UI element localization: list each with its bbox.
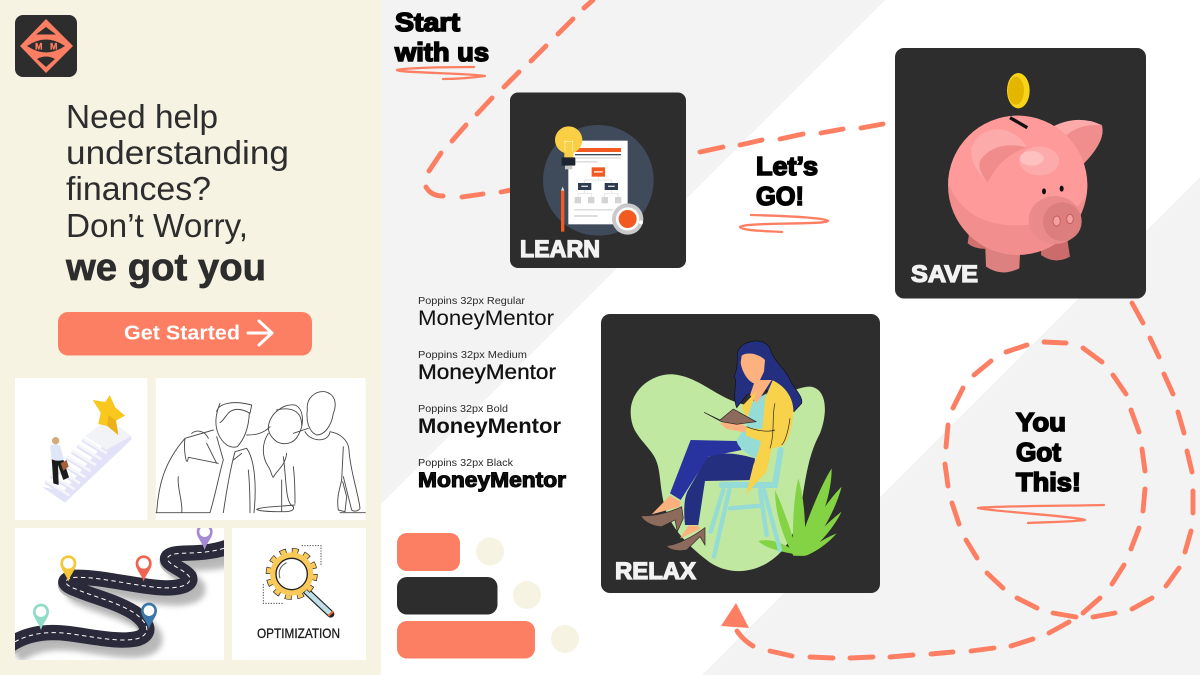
heading: need help understanding finances: we got you [65, 247, 266, 289]
specimen: regular [418, 295, 554, 330]
text: start with us: Start [395, 7, 460, 37]
hand [720, 420, 747, 432]
specimen: bold: MoneyMentor [418, 415, 561, 438]
green blob [631, 374, 825, 571]
arrow head [721, 603, 749, 628]
text: lets go [740, 151, 828, 232]
pin: yellow [60, 555, 76, 582]
cardigan [742, 380, 793, 494]
heading: need help understanding finances: Need help [66, 98, 218, 135]
stair case [42, 425, 132, 503]
front leg [670, 440, 742, 500]
button: get started: Get Started [124, 322, 240, 344]
left friend outline [157, 403, 255, 513]
label: optimization: OPTIMIZATION [257, 625, 340, 641]
label: relax: RELAX [615, 558, 696, 585]
arrow: dashed path from learn to save [700, 124, 883, 152]
road centre line [8, 547, 227, 646]
heading: need help understanding finances: understanding [66, 134, 289, 171]
typography specimen list [418, 295, 566, 492]
panel: left cream sidebar [0, 0, 381, 675]
specimen: black: Poppins 32px Black [418, 457, 514, 469]
text: you got this: Got [1016, 437, 1061, 467]
specimen: regular: MoneyMentor [418, 307, 554, 330]
panel: save card [895, 48, 1146, 298]
top [737, 393, 767, 458]
shoes [641, 507, 705, 551]
feet [652, 496, 700, 538]
icon: gear and magnifier [263, 546, 333, 616]
book [704, 409, 756, 424]
icon: piggy bank [943, 73, 1103, 272]
text: you got this: You [1016, 407, 1066, 437]
label: learn: LEARN [520, 236, 600, 263]
text: you got this [978, 407, 1104, 523]
panel: winding road map [15, 528, 224, 660]
background: upper-left grey diagonal [381, 0, 885, 504]
text: start with us [394, 7, 489, 79]
back leg [684, 453, 755, 525]
specimen: bold: Poppins 32px Bold [418, 403, 508, 415]
background: right area [381, 0, 1200, 675]
pin: red [136, 555, 152, 582]
specimen: black: MoneyMentor [418, 469, 566, 492]
icon: MoneyMentor logo [15, 15, 77, 77]
panel: relax card [601, 314, 880, 593]
panel: optimization image [232, 528, 366, 660]
text: start with us: with us [394, 37, 489, 67]
arrow: dashed path from top into learn card [426, 0, 593, 197]
star [93, 395, 125, 435]
heading: need help understanding finances [65, 98, 289, 289]
icon: MoneyMentor logo: M [35, 42, 42, 52]
road shadow [16, 557, 235, 656]
road edge [8, 550, 227, 649]
road surface [8, 547, 227, 646]
specimen: medium: Poppins 32px Medium [418, 349, 527, 361]
specimen: medium [418, 349, 556, 384]
right friend outline [156, 392, 366, 513]
panel: stairs to star image [15, 378, 147, 520]
text: you got this: This! [1016, 467, 1081, 497]
text: lets go: GO! [756, 181, 804, 211]
panel: learn card [510, 92, 686, 268]
label: save: SAVE [911, 261, 978, 288]
panel: line drawing of three friends [156, 378, 366, 520]
specimen: medium: MoneyMentor [418, 361, 556, 384]
heading: need help understanding finances: Don’t Worry, [66, 207, 248, 244]
middle friend outline [247, 405, 302, 512]
pin: purple [196, 528, 213, 550]
businessman [50, 437, 69, 485]
specimen: regular: Poppins 32px Regular [418, 295, 526, 307]
colour swatches [397, 533, 579, 658]
cardigan lines [747, 403, 790, 448]
specimen: black [418, 457, 566, 492]
icon: document with lightbulb [543, 125, 654, 236]
text: lets go: Let’s [756, 151, 818, 181]
face [741, 354, 772, 403]
specimen: bold [418, 403, 561, 438]
button: get started [58, 312, 312, 356]
heading: need help understanding finances: finances? [66, 170, 211, 207]
illustration: woman reading on chair [631, 341, 842, 571]
icon: MoneyMentor logo: M [50, 42, 58, 52]
hair [734, 341, 802, 412]
chair [711, 450, 781, 557]
plant [758, 468, 842, 556]
pin: teal [33, 604, 49, 630]
pin: blue [141, 603, 157, 629]
background: lower-right grey diagonal [702, 177, 1200, 675]
arrow: dashed loop from save to relax [737, 303, 1193, 658]
